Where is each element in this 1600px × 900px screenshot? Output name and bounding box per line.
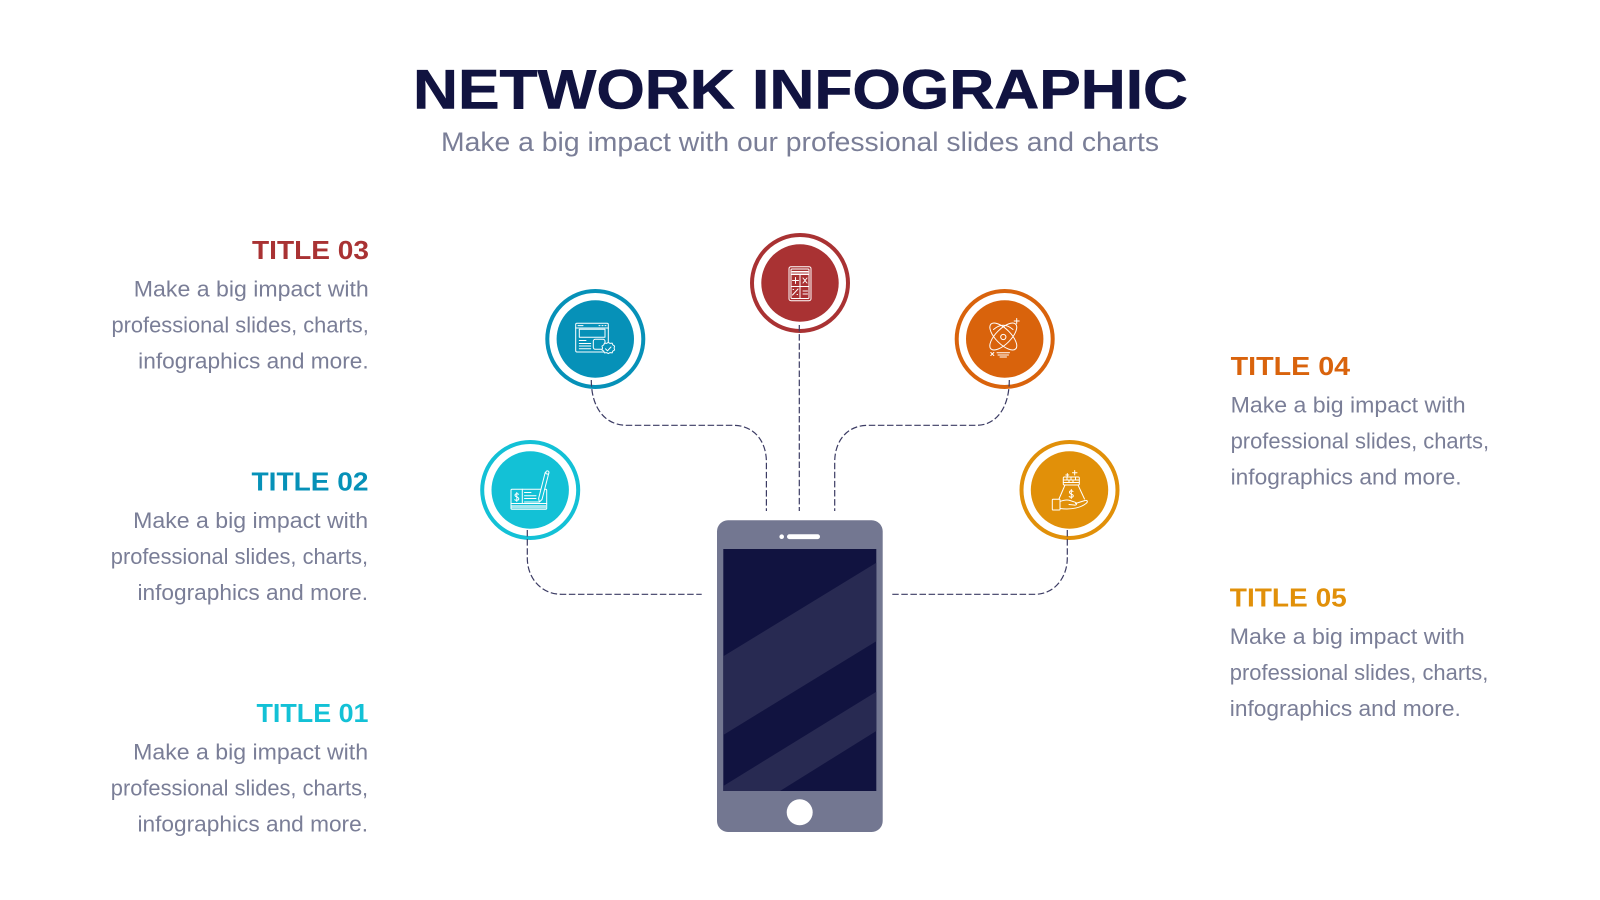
- heading: title 05: TITLE 05: [1230, 583, 1347, 613]
- phone home button: [787, 799, 813, 825]
- description: title 02: Make a big impact with: [133, 508, 368, 533]
- icon node 02: web page with badge: [547, 291, 643, 387]
- connector: node 01 to phone: [527, 530, 702, 594]
- description: title 05: infographics and more.: [1230, 696, 1461, 721]
- description: title 04: Make a big impact with: [1231, 393, 1466, 418]
- text block: title 01: [111, 698, 369, 836]
- description: title 01: [111, 739, 368, 836]
- description: title 01: professional slides, charts,: [111, 775, 368, 800]
- description: title 03: [112, 276, 369, 373]
- description: title 03: professional slides, charts,: [112, 312, 369, 337]
- description: title 03: infographics and more.: [138, 348, 369, 373]
- phone screen: [723, 549, 876, 791]
- screen reflections: [723, 563, 876, 791]
- description: title 05: [1230, 624, 1488, 721]
- text block: title 04: [1231, 351, 1489, 490]
- icon node 01: cheque and pen: [482, 442, 578, 538]
- description: title 01: Make a big impact with: [133, 739, 368, 764]
- description: title 01: infographics and more.: [138, 811, 368, 836]
- connector: node 02 to phone: [591, 380, 766, 511]
- icon node 03: calculator: [752, 235, 848, 331]
- connector: node 04 to phone: [835, 380, 1009, 511]
- heading: title 03: TITLE 03: [252, 235, 369, 265]
- icon node 05: hand holding money bag: [1022, 442, 1118, 538]
- heading: title 01: TITLE 01: [256, 698, 368, 728]
- smartphone: [717, 520, 883, 832]
- phone speaker: [779, 534, 820, 539]
- heading: title 04: TITLE 04: [1231, 351, 1351, 381]
- connector: node 03 to phone: [798, 325, 800, 511]
- description: title 02: [111, 508, 368, 605]
- description: title 04: infographics and more.: [1231, 465, 1462, 490]
- connector: node 05 to phone: [892, 530, 1067, 594]
- description: title 02: infographics and more.: [138, 580, 368, 605]
- description: title 05: professional slides, charts,: [1230, 660, 1488, 685]
- icon node 04: atom light bulb: [957, 291, 1053, 387]
- heading: title 02: TITLE 02: [252, 466, 368, 496]
- text block: title 02: [111, 466, 369, 605]
- description: title 05: Make a big impact with: [1230, 624, 1465, 649]
- text block: title 03: [112, 235, 369, 373]
- description: title 02: professional slides, charts,: [111, 544, 368, 569]
- subtitle: Make a big impact with our professional slides and charts: [441, 127, 1159, 157]
- description: title 04: [1231, 393, 1489, 490]
- description: title 04: professional slides, charts,: [1231, 429, 1489, 454]
- title: NETWORK INFOGRAPHIC: [413, 58, 1188, 120]
- description: title 03: Make a big impact with: [134, 276, 369, 301]
- text block: title 05: [1230, 583, 1488, 721]
